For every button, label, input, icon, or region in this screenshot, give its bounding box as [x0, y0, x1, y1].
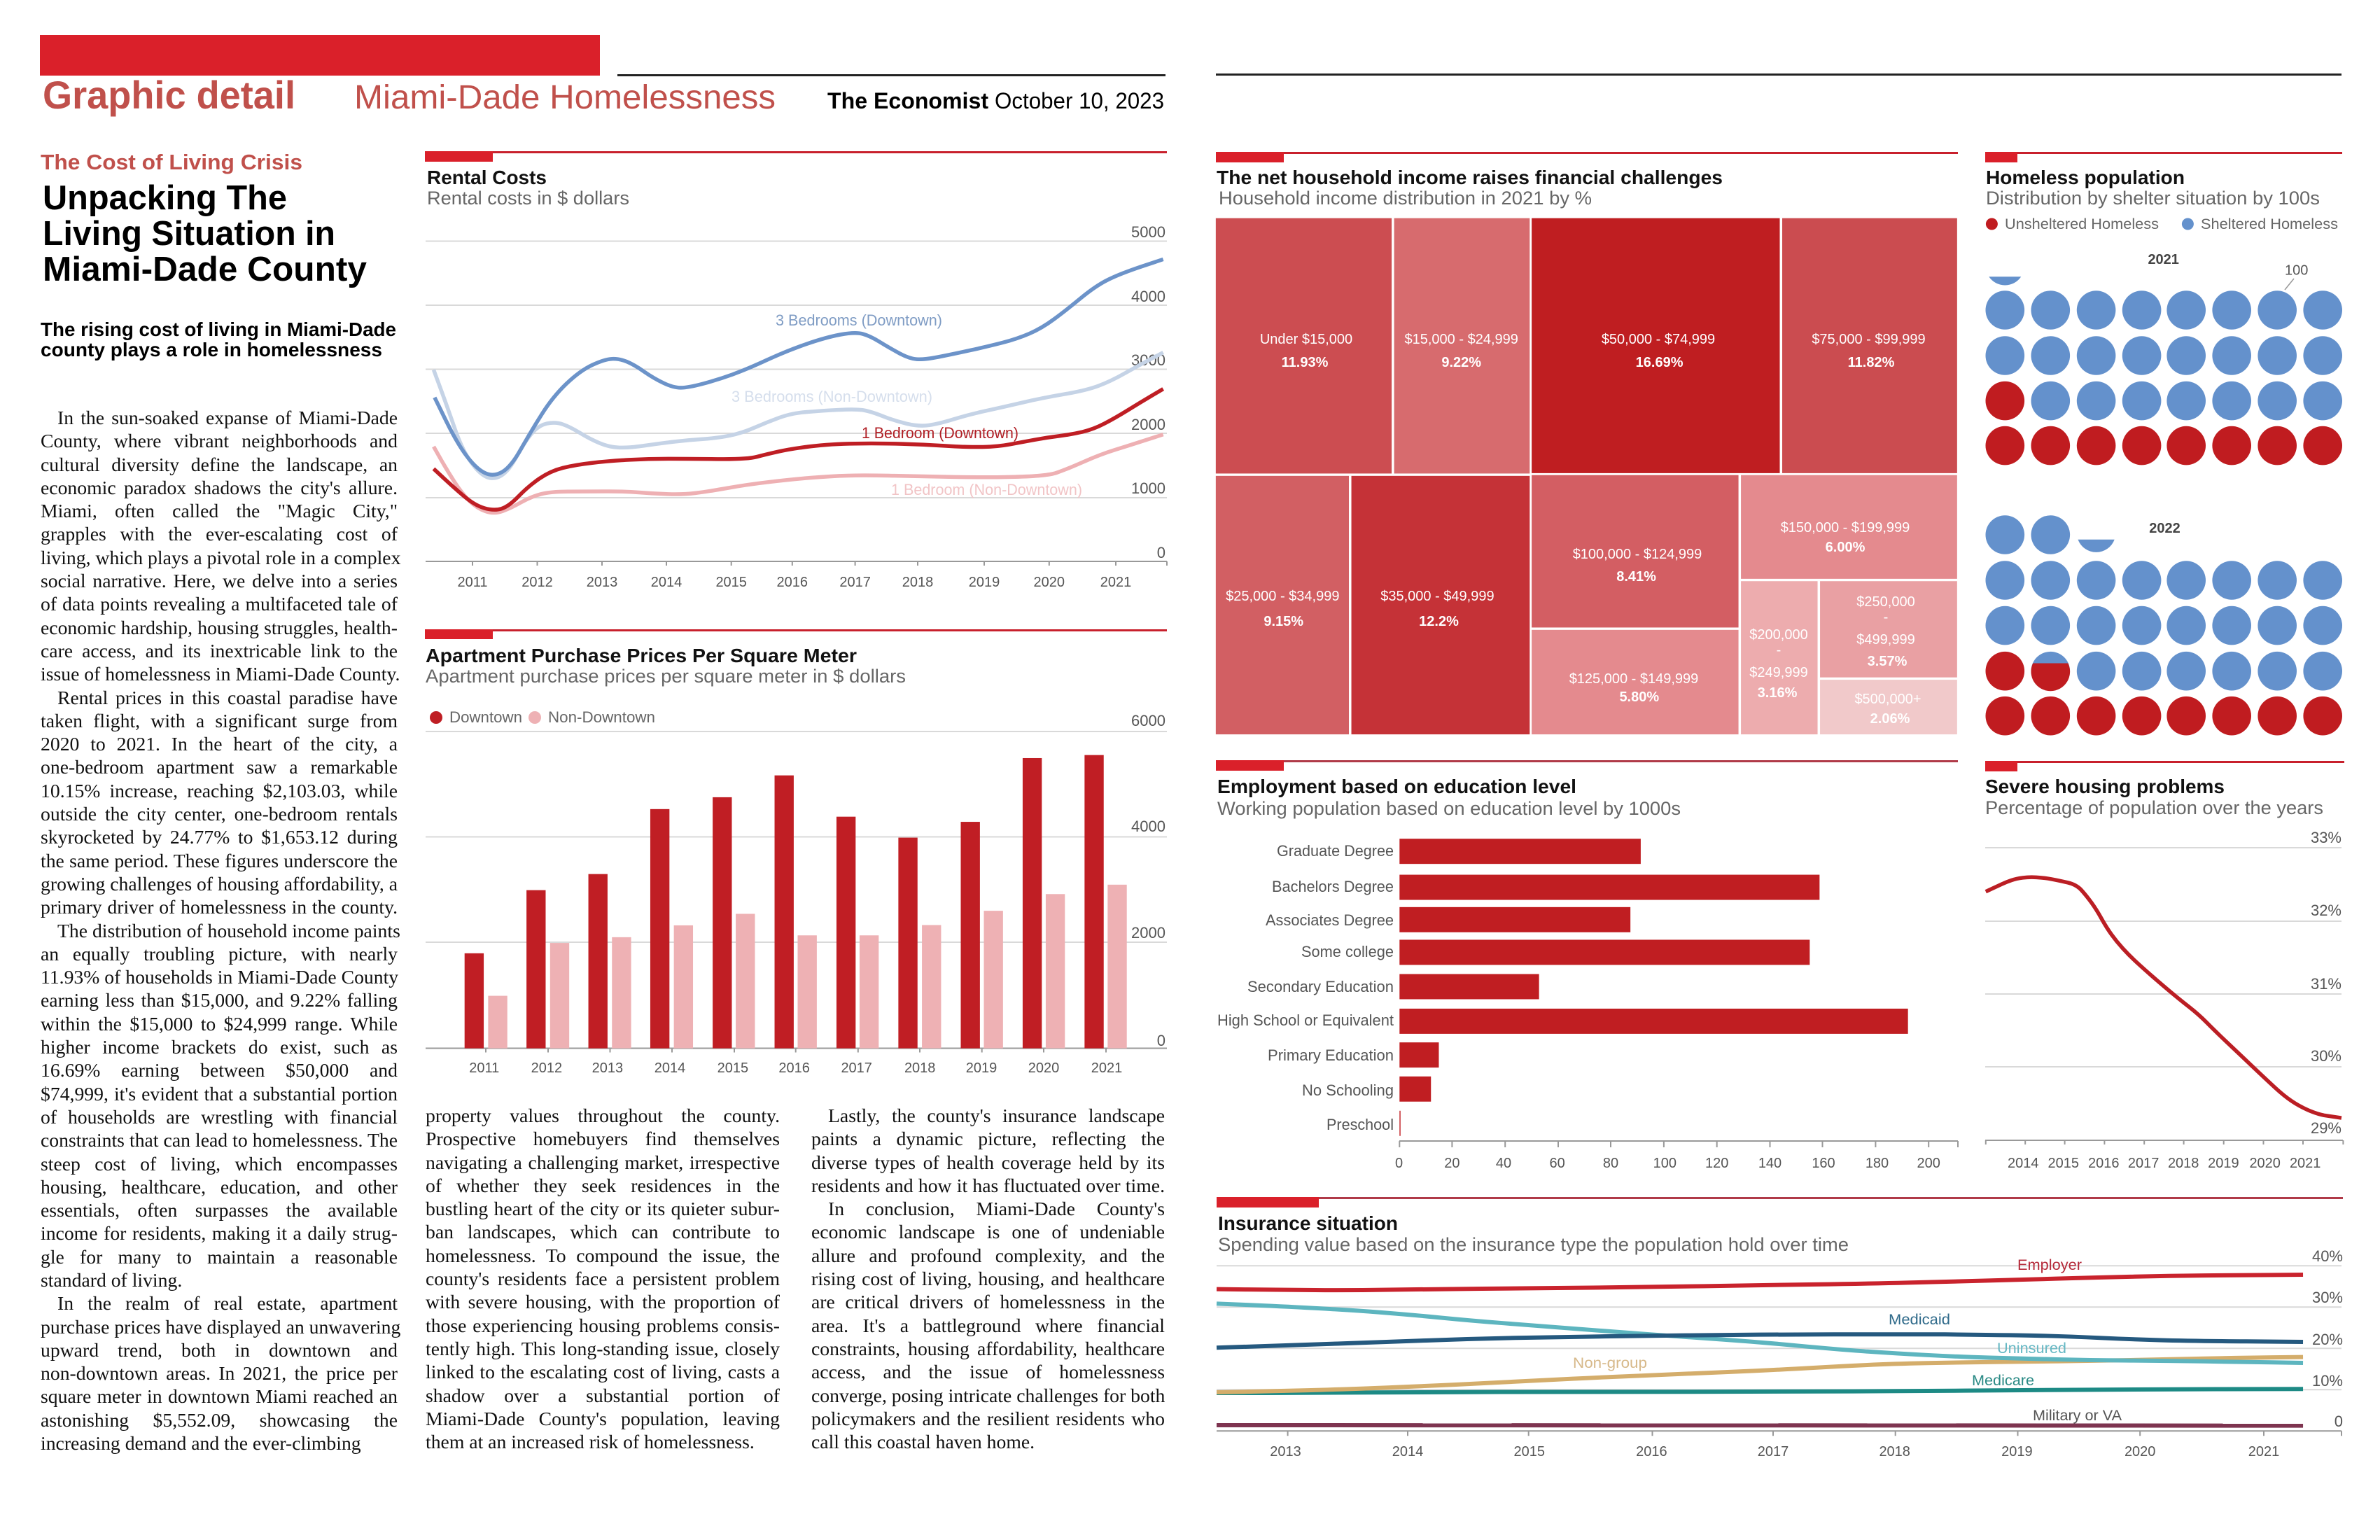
dots 2022: [1985, 515, 2342, 735]
x axis labels: 2014: [1392, 1444, 1423, 1460]
y axis labels: 4000: [1131, 288, 1166, 305]
body text column 3: Lastly, the county's insurance landscape: [828, 1105, 1165, 1126]
x axis labels: 2020: [2249, 1156, 2281, 1171]
y axis labels: 5000: [1131, 223, 1166, 241]
x axis labels: 2013: [1270, 1444, 1301, 1460]
subheading: rental costs: Rental costs in $ dollars: [427, 188, 629, 209]
x axis labels: 2020: [2124, 1444, 2155, 1460]
x axis labels: 2015: [718, 1060, 748, 1076]
legend: [1986, 216, 2338, 232]
year label 2021: 2021: [2148, 252, 2179, 267]
body text column 1: County, where vibrant neighborhoods and: [41, 430, 398, 451]
treemap labels: Under $15,000: [1260, 332, 1352, 347]
x axis labels: 40: [1496, 1156, 1511, 1171]
body text column 1: income for residents, making it a daily strug-: [41, 1222, 398, 1244]
standfirst: The rising cost of living in Miami-Dade: [41, 318, 396, 340]
body text column 1: social narrative. Here, we delve into a series: [41, 570, 398, 592]
x axis labels: 2013: [592, 1060, 623, 1076]
legend: Downtown: [449, 708, 522, 726]
x axis labels: 2017: [1758, 1444, 1788, 1460]
subheading: insurance: Spending value based on the insurance type the population hold over time: [1218, 1234, 1849, 1255]
body text column 2: linked to the escalating cost of living, casts a: [426, 1361, 780, 1382]
body text column 1: housing, healthcare, education, and other: [41, 1176, 398, 1198]
treemap labels: 9.22%: [1441, 355, 1481, 370]
treemap labels: $499,999: [1856, 632, 1915, 648]
treemap labels: 2.06%: [1870, 711, 1910, 727]
series labels: Employer: [2017, 1257, 2082, 1273]
category labels: No Schooling: [1302, 1082, 1394, 1099]
y axis labels: 20%: [2312, 1331, 2343, 1348]
treemap labels: $125,000 - $149,999: [1569, 671, 1698, 687]
panel: rental costs line chart: [425, 151, 1167, 590]
x axis labels: 2014: [651, 575, 682, 590]
body text column 1: square meter in downtown Miami reached an: [41, 1385, 398, 1407]
treemap labels: $200,000: [1749, 627, 1808, 643]
y axis labels: [2311, 829, 2342, 1137]
body text column 2: shadow over a substantial portion of: [426, 1385, 780, 1406]
treemap labels: 3.57%: [1868, 654, 1907, 669]
series labels: Medicaid: [1889, 1312, 1950, 1328]
y axis labels: [1131, 712, 1166, 1049]
x axis labels: 2021: [2290, 1156, 2320, 1171]
headline: Miami-Dade County: [43, 251, 367, 288]
x axis labels: 2017: [2128, 1156, 2159, 1171]
body text column 3: allure and profound complexity, and the: [811, 1245, 1165, 1266]
body text column 3: policymakers and the resilient residents who: [811, 1408, 1165, 1429]
x axis labels: 180: [1865, 1156, 1889, 1171]
heading: employment: Employment based on education level: [1217, 776, 1576, 797]
x axis labels: 2016: [2088, 1156, 2120, 1171]
panel: insurance situation line chart: [1217, 1197, 2343, 1460]
heading: purchase prices: Apartment Purchase Prices Per Square Meter: [426, 645, 857, 666]
masthead: [40, 35, 2342, 117]
x axis labels: 2015: [715, 575, 747, 590]
body text column 3: access, and the issue of homelessness: [811, 1361, 1165, 1382]
line: severe housing share: [1986, 877, 2342, 1118]
series labels: [732, 312, 1082, 498]
category labels: Graduate Degree: [1277, 842, 1394, 860]
body text column 1: [41, 407, 400, 1454]
panel: employment by education bar chart: [1216, 760, 1958, 1171]
treemap labels: $249,999: [1749, 665, 1808, 680]
x axis labels: 2018: [2168, 1156, 2199, 1171]
x axis labels: 2012: [531, 1060, 562, 1076]
y axis labels: 33%: [2311, 829, 2342, 846]
body text column 1: non-downtown areas. In 2021, the price per: [41, 1362, 398, 1384]
y axis labels: 0: [2334, 1413, 2343, 1430]
body text column 3: are critical drivers of homelessness in the: [811, 1291, 1165, 1312]
annotation: 100: 100: [2285, 263, 2308, 279]
panel: apartment purchase prices bar chart: [425, 629, 1167, 1076]
body text column 1: purchase prices have displayed an unwavering: [41, 1316, 400, 1338]
body text column 1: In the sun-soaked expanse of Miami-Dade: [57, 407, 398, 428]
category labels: Secondary Education: [1247, 978, 1394, 995]
body text column 2: tently high. This long-standing issue, closely: [426, 1338, 780, 1359]
x axis labels: 80: [1603, 1156, 1618, 1171]
x axis labels: 2019: [2208, 1156, 2239, 1171]
subheading: employment: Working population based on education level by 1000s: [1217, 798, 1681, 819]
y axis labels: 6000: [1131, 712, 1166, 729]
subheading: purchase prices: Apartment purchase prices per square meter in $ dollars: [426, 666, 906, 687]
body text column 2: Miami-Dade County's population, leaving: [426, 1408, 780, 1429]
y axis labels: 10%: [2312, 1372, 2343, 1390]
treemap labels: 16.69%: [1636, 355, 1684, 370]
category labels: Preschool: [1326, 1116, 1394, 1133]
category labels: [1217, 842, 1394, 1133]
subheading: household income: Household income distribution in 2021 by %: [1219, 188, 1592, 209]
x axis labels: 20: [1444, 1156, 1460, 1171]
x axis labels: 2011: [457, 575, 488, 590]
body text column 1: essentials, often surpasses the available: [41, 1199, 398, 1221]
treemap labels: $100,000 - $124,999: [1573, 547, 1702, 562]
treemap labels: $15,000 - $24,999: [1405, 332, 1518, 347]
body text column 1: cultural diversity define the landscape, an: [41, 454, 398, 475]
category labels: High School or Equivalent: [1217, 1011, 1394, 1029]
y axis labels: 40%: [2312, 1247, 2343, 1265]
x axis labels: 2018: [1879, 1444, 1910, 1460]
publication and date: October 10, 2023: [995, 88, 1164, 113]
body text column 2: homelessness. To compound the issue, the: [426, 1245, 780, 1266]
body text column 1: within the $15,000 to $24,999 range. While: [41, 1013, 398, 1035]
x axis labels: 140: [1758, 1156, 1782, 1171]
x axis labels: 2018: [902, 575, 933, 590]
body text column 1: taken flight, with a significant surge from: [41, 710, 398, 732]
body text column 1: Rental prices in this coastal paradise have: [57, 687, 398, 708]
publication and date: The Economist: [827, 88, 988, 113]
treemap labels: $75,000 - $99,999: [1812, 332, 1926, 347]
body text column 2: those experiencing housing problems consis-: [426, 1315, 780, 1336]
bars: [1399, 839, 1908, 1136]
body text column 2: [426, 1105, 780, 1452]
legend: Non-Downtown: [548, 708, 655, 726]
body text column 2: county's residents face a persistent problem: [426, 1268, 780, 1289]
x axis labels: 2021: [1100, 575, 1131, 590]
body text column 2: navigating a challenging market, irrespective: [426, 1152, 780, 1173]
x axis labels: [2008, 1156, 2320, 1171]
body text column 2: them at an increased risk of homelessness.: [426, 1431, 755, 1452]
treemap labels: 6.00%: [1826, 540, 1865, 555]
body text column 1: one-bedroom apartment saw a remarkable: [41, 756, 398, 778]
line series: [1217, 1275, 2303, 1426]
x axis labels: 2017: [841, 1060, 872, 1076]
treemap labels: 3.16%: [1758, 685, 1798, 701]
dots 2021: [1985, 276, 2342, 465]
treemap labels: 9.15%: [1264, 614, 1303, 629]
body text column 1: economic paradox shadows the city's allure.: [41, 477, 398, 498]
body text column 3: area. It's a battleground where financial: [811, 1315, 1165, 1336]
year label 2022: 2022: [2149, 521, 2180, 536]
headline: Unpacking The: [43, 179, 287, 217]
series labels: 3 Bedrooms (Downtown): [776, 312, 942, 329]
body text column 1: standard of living.: [41, 1269, 182, 1291]
panel: household income treemap: [1216, 152, 1958, 734]
y axis labels: 0: [1157, 1032, 1166, 1049]
x axis labels: 160: [1812, 1156, 1835, 1171]
body text column 1: issue of homelessness in Miami-Dade County.: [41, 663, 400, 685]
category labels: Associates Degree: [1266, 911, 1394, 929]
series labels: [1573, 1257, 2122, 1424]
x axis labels: 2016: [1636, 1444, 1667, 1460]
x axis labels: 2012: [522, 575, 553, 590]
body text column 1: of households are wrestling with financial: [41, 1106, 398, 1128]
x axis labels: 2015: [1514, 1444, 1545, 1460]
x axis labels: [457, 575, 1131, 590]
x axis labels: 2019: [966, 1060, 997, 1076]
body text column 1: 10.15% increase, reaching $2,103.03, while: [41, 780, 398, 802]
x axis labels: 2018: [904, 1060, 935, 1076]
body text column 1: growing challenges of housing affordability, a: [41, 873, 398, 895]
x axis labels: 2013: [587, 575, 617, 590]
body text column 2: Prospective homebuyers find themselves: [426, 1128, 780, 1149]
heading: household income: The net household income raises financial challenges: [1217, 167, 1723, 188]
y axis labels: 30%: [2311, 1047, 2342, 1065]
y axis labels: 2000: [1131, 416, 1166, 433]
panel: homeless population unit chart: [1985, 152, 2342, 735]
treemap labels: $35,000 - $49,999: [1380, 589, 1494, 604]
standfirst: county plays a role in homelessness: [41, 339, 382, 360]
x axis labels: 2021: [1091, 1060, 1122, 1076]
series labels: Medicare: [1972, 1373, 2034, 1389]
series labels: Non-group: [1573, 1355, 1647, 1371]
body text column 3: diverse types of health coverage held by its: [811, 1152, 1165, 1173]
body text column 1: care access, and its inextricable link to the: [41, 640, 398, 662]
y axis labels: 0: [1157, 544, 1166, 561]
body text column 1: the same period. These figures underscore the: [41, 850, 398, 872]
series labels: 3 Bedrooms (Non-Downtown): [732, 388, 932, 405]
series labels: Military or VA: [2033, 1408, 2122, 1424]
subheading: homeless population: Distribution by shelter situation by 100s: [1986, 188, 2320, 209]
masthead title: Graphic detail: Graphic detail: [43, 73, 295, 117]
body text column 2: of whether they seek residences in the: [426, 1175, 780, 1196]
treemap labels: -: [1884, 610, 1888, 625]
body text column 3: paints a dynamic picture, reflecting the: [811, 1128, 1165, 1149]
x axis labels: 2021: [2248, 1444, 2279, 1460]
heading: homeless population: Homeless population: [1986, 167, 2185, 188]
series labels: 1 Bedroom (Non-Downtown): [891, 481, 1082, 498]
body text column 3: constraints, housing affordability, healthcare: [811, 1338, 1165, 1359]
x axis labels: 0: [1395, 1156, 1403, 1171]
treemap labels: $500,000+: [1854, 692, 1921, 707]
body text column 1: primary driver of homelessness in the county.: [41, 896, 398, 918]
treemap labels: 8.41%: [1616, 569, 1656, 584]
body text column 1: 11.93% of households in Miami-Dade County: [41, 966, 398, 988]
body text column 1: of data points revealing a multifaceted tale of: [41, 593, 398, 615]
body text column 1: constraints that can lead to homelessness. The: [41, 1129, 398, 1151]
y axis labels: 30%: [2312, 1289, 2343, 1306]
panel: severe housing problems line chart: [1985, 761, 2344, 1171]
body text column 1: upward trend, both in downtown and: [41, 1339, 398, 1361]
line series: [433, 259, 1163, 513]
body text column 1: outside the city center, one-bedroom rentals: [41, 803, 398, 825]
bars: [465, 755, 1127, 1049]
treemap labels: $50,000 - $74,999: [1602, 332, 1715, 347]
heading: severe housing: Severe housing problems: [1985, 776, 2225, 797]
body text column 3: In conclusion, Miami-Dade County's: [828, 1198, 1165, 1219]
x axis labels: 2014: [2008, 1156, 2039, 1171]
x axis labels: 2014: [654, 1060, 685, 1076]
subheading: severe housing: Percentage of population over the years: [1985, 797, 2323, 818]
body text column 1: steep cost of living, which encompasses: [41, 1152, 398, 1175]
body text column 2: bustling heart of the city or its quieter subur-: [426, 1198, 780, 1219]
y axis labels: 3000: [1131, 351, 1166, 369]
category labels: Primary Education: [1268, 1046, 1394, 1064]
body text column 1: 16.69% earning between $50,000 and: [41, 1059, 398, 1081]
treemap labels: 12.2%: [1419, 614, 1459, 629]
legend: [430, 708, 655, 726]
treemap labels: $25,000 - $34,999: [1226, 589, 1339, 604]
body text column 1: Miami, often called the "Magic City,": [41, 500, 398, 522]
body text column 1: increasing demand and the ever-climbing: [41, 1432, 361, 1454]
body text column 1: $74,999, it's evident that a substantial portion: [41, 1083, 398, 1105]
body text column 1: The distribution of household income paints: [57, 920, 400, 941]
y axis labels: 31%: [2311, 975, 2342, 993]
headline: Living Situation in: [43, 215, 335, 253]
x axis labels: 200: [1917, 1156, 1940, 1171]
y axis labels: 32%: [2311, 902, 2342, 919]
body text column 1: grapples with the ever-escalating cost of: [41, 523, 398, 545]
body text column 1: earning less than $15,000, and 9.22% falling: [41, 989, 398, 1011]
series labels: Uninsured: [1997, 1340, 2066, 1357]
category labels: Some college: [1301, 943, 1394, 960]
x axis labels: 2011: [469, 1060, 499, 1076]
x axis labels: 2016: [778, 1060, 810, 1076]
x axis labels: 2020: [1034, 575, 1065, 590]
x axis labels: [1395, 1156, 1940, 1171]
treemap labels: $150,000 - $199,999: [1781, 520, 1910, 536]
body text column 3: economic landscape is one of undeniable: [811, 1221, 1165, 1242]
series labels: 1 Bedroom (Downtown): [862, 424, 1018, 442]
y axis labels: 29%: [2311, 1119, 2342, 1137]
x axis labels: 2015: [2048, 1156, 2079, 1171]
x axis labels: 2020: [1028, 1060, 1059, 1076]
x axis labels: 2016: [777, 575, 808, 590]
body text column 3: converge, posing intricate challenges for both: [811, 1385, 1165, 1406]
legend: Sheltered Homeless: [2201, 216, 2338, 232]
y axis labels: 2000: [1131, 924, 1166, 941]
y axis labels: 1000: [1131, 479, 1166, 497]
treemap labels: 5.80%: [1619, 690, 1659, 705]
legend: Unsheltered Homeless: [2005, 216, 2159, 232]
x axis labels: 2019: [969, 575, 1000, 590]
x axis labels: 120: [1705, 1156, 1728, 1171]
y axis labels: 4000: [1131, 818, 1166, 835]
body text column 3: residents and how it has fluctuated over time.: [811, 1175, 1165, 1196]
treemap labels: 11.93%: [1282, 355, 1329, 370]
treemap labels: [1226, 332, 1926, 727]
x axis labels: 2017: [839, 575, 871, 590]
body text column 3: call this coastal haven home.: [811, 1431, 1035, 1452]
body text column 1: economic hardship, housing struggles, health-: [41, 617, 398, 638]
treemap labels: $250,000: [1856, 594, 1915, 610]
x axis labels: 2019: [2001, 1444, 2033, 1460]
body text column 2: with severe housing, with the proportion of: [426, 1291, 780, 1312]
y axis labels: [1131, 223, 1166, 561]
body text column 1: astonishing $5,552.09, showcasing the: [41, 1409, 398, 1431]
body text column 1: an equally troubling picture, with nearly: [41, 943, 398, 965]
body text column 3: rising cost of living, housing, and healthcare: [811, 1268, 1165, 1289]
article heading block: [41, 150, 396, 360]
kicker: The Cost of Living Crisis: [41, 150, 302, 174]
body text column 1: skyrocketed by 24.77% to $1,653.12 during: [41, 826, 398, 848]
x axis labels: 60: [1549, 1156, 1565, 1171]
annotation: 100: [2285, 263, 2308, 290]
body text column 1: In the realm of real estate, apartment: [57, 1292, 398, 1314]
x axis labels: 100: [1653, 1156, 1676, 1171]
body text column 3: [811, 1105, 1165, 1452]
body text column 1: 2020 to 2021. In the heart of the city, a: [41, 733, 398, 755]
treemap labels: -: [1777, 643, 1781, 658]
category labels: Bachelors Degree: [1272, 878, 1394, 895]
x axis labels: [469, 1060, 1122, 1076]
heading: insurance: Insurance situation: [1218, 1212, 1398, 1234]
body text column 1: living, which plays a pivotal role in a complex: [41, 547, 400, 568]
masthead subtitle: Miami-Dade Homelessness: [354, 79, 776, 116]
body text column 2: ban landscapes, which can contribute to: [426, 1221, 780, 1242]
body text column 1: gle for many to maintain a reasonable: [41, 1246, 398, 1268]
body text column 2: property values throughout the county.: [426, 1105, 780, 1126]
heading: rental costs: Rental Costs: [427, 167, 547, 188]
y axis labels: [2312, 1247, 2343, 1430]
treemap labels: 11.82%: [1848, 355, 1895, 370]
treemap cells: [1216, 218, 1957, 734]
body text column 1: higher income brackets do exist, such as: [41, 1036, 398, 1058]
x axis labels: [1270, 1444, 2279, 1460]
